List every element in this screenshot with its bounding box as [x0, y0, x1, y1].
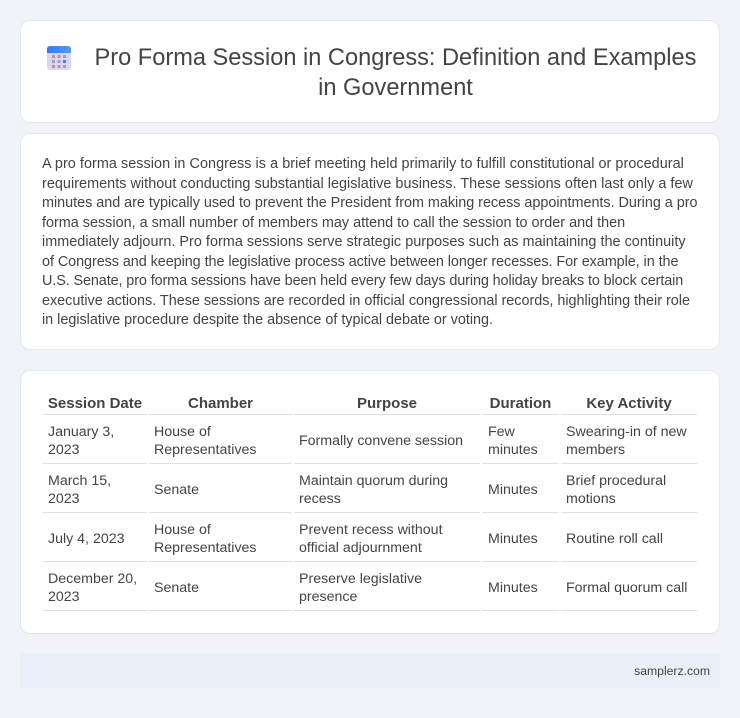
table row: December 20: Senate — [154, 580, 199, 596]
panel: sessions table — [20, 370, 720, 634]
text block: definition paragraph: minutes and are typically used to prevent the President from making recess appointments. During a pro — [42, 195, 698, 211]
table row: March 15: motions — [566, 491, 616, 507]
table header row: Session Date — [48, 395, 142, 412]
table row: December 20: December 20, — [48, 571, 137, 587]
title: Pro Forma Session in Congress: Definition and Examples — [95, 45, 696, 71]
text block: definition paragraph: forma session, a small number of members may attend to call the session to order and then — [42, 214, 625, 230]
table row: December 20: Minutes — [488, 580, 538, 596]
text block: definition paragraph: requirements without conducting substantial legislative business. These sessions often last only a few — [42, 176, 693, 192]
table row: March 15: Senate — [154, 482, 199, 498]
table row: July 4: Minutes — [488, 531, 538, 547]
title — [95, 45, 696, 100]
table row: March 15: Brief procedural — [566, 473, 666, 489]
table row: July 4: July 4, 2023 — [48, 531, 125, 547]
table row: July 4 — [43, 512, 697, 556]
table row: July 4: Representatives — [154, 540, 257, 556]
table row: March 15: March 15, — [48, 473, 111, 489]
panel: header — [20, 20, 720, 123]
table header row: Duration — [490, 395, 551, 412]
text block: definition paragraph: U.S. Senate, pro forma sessions have been held every few days during holiday breaks to block certain — [42, 273, 683, 289]
footer bar — [20, 654, 720, 688]
text block: definition paragraph: in legislative procedure despite the absence of typical debate or voting. — [42, 312, 493, 328]
table row: January 3: Swearing-in of new — [566, 424, 687, 440]
table row: December 20: 2023 — [48, 589, 80, 605]
text block: definition paragraph — [42, 156, 698, 328]
table row: March 15: Minutes — [488, 482, 538, 498]
table row: January 3: Few — [488, 424, 515, 440]
text block: definition paragraph: executive actions. These sessions are recorded in official congressional records, highlighting their role — [42, 292, 690, 308]
table row: December 20: presence — [299, 589, 357, 605]
icon: calendar — [47, 46, 71, 70]
footer source text: samplerz.com — [634, 664, 710, 678]
text block: definition paragraph: of Congress and keeping the legislative process active between longer recesses. For example, in the — [42, 254, 678, 270]
panel: description — [20, 133, 720, 350]
title: in Government — [318, 74, 473, 100]
table row: January 3: Formally convene session — [299, 433, 463, 449]
table row: March 15: Maintain quorum during — [299, 473, 448, 489]
table row: July 4: House of — [154, 522, 211, 538]
table row: December 20: Formal quorum call — [566, 580, 687, 596]
table header row: Chamber — [188, 395, 253, 412]
table header row — [48, 395, 672, 412]
table row: January 3: January 3, — [48, 424, 114, 440]
table row: January 3: Representatives — [154, 442, 257, 458]
table row: July 4: Routine roll call — [566, 531, 663, 547]
table row: December 20 — [43, 561, 697, 611]
table row: January 3: 2023 — [48, 442, 80, 458]
table row: July 4: Prevent recess without — [299, 522, 443, 538]
table row: March 15: recess — [299, 491, 341, 507]
table row: January 3: minutes — [488, 442, 538, 458]
text block: definition paragraph: immediately adjourn. Pro forma sessions serve strategic purposes such as maintaining the continuity — [42, 234, 686, 250]
table header row: Purpose — [357, 395, 417, 412]
table row: July 4: official adjournment — [299, 540, 422, 556]
text block: definition paragraph: A pro forma session in Congress is a brief meeting held primarily to fulfill constitutional or procedural — [42, 156, 684, 172]
table row: March 15 — [43, 463, 697, 507]
table row: January 3 — [43, 414, 697, 458]
table header row: Key Activity — [586, 395, 672, 412]
table row: January 3: House of — [154, 424, 211, 440]
table row: December 20: Preserve legislative — [299, 571, 422, 587]
table row: March 15: 2023 — [48, 491, 80, 507]
table row: January 3: members — [566, 442, 625, 458]
